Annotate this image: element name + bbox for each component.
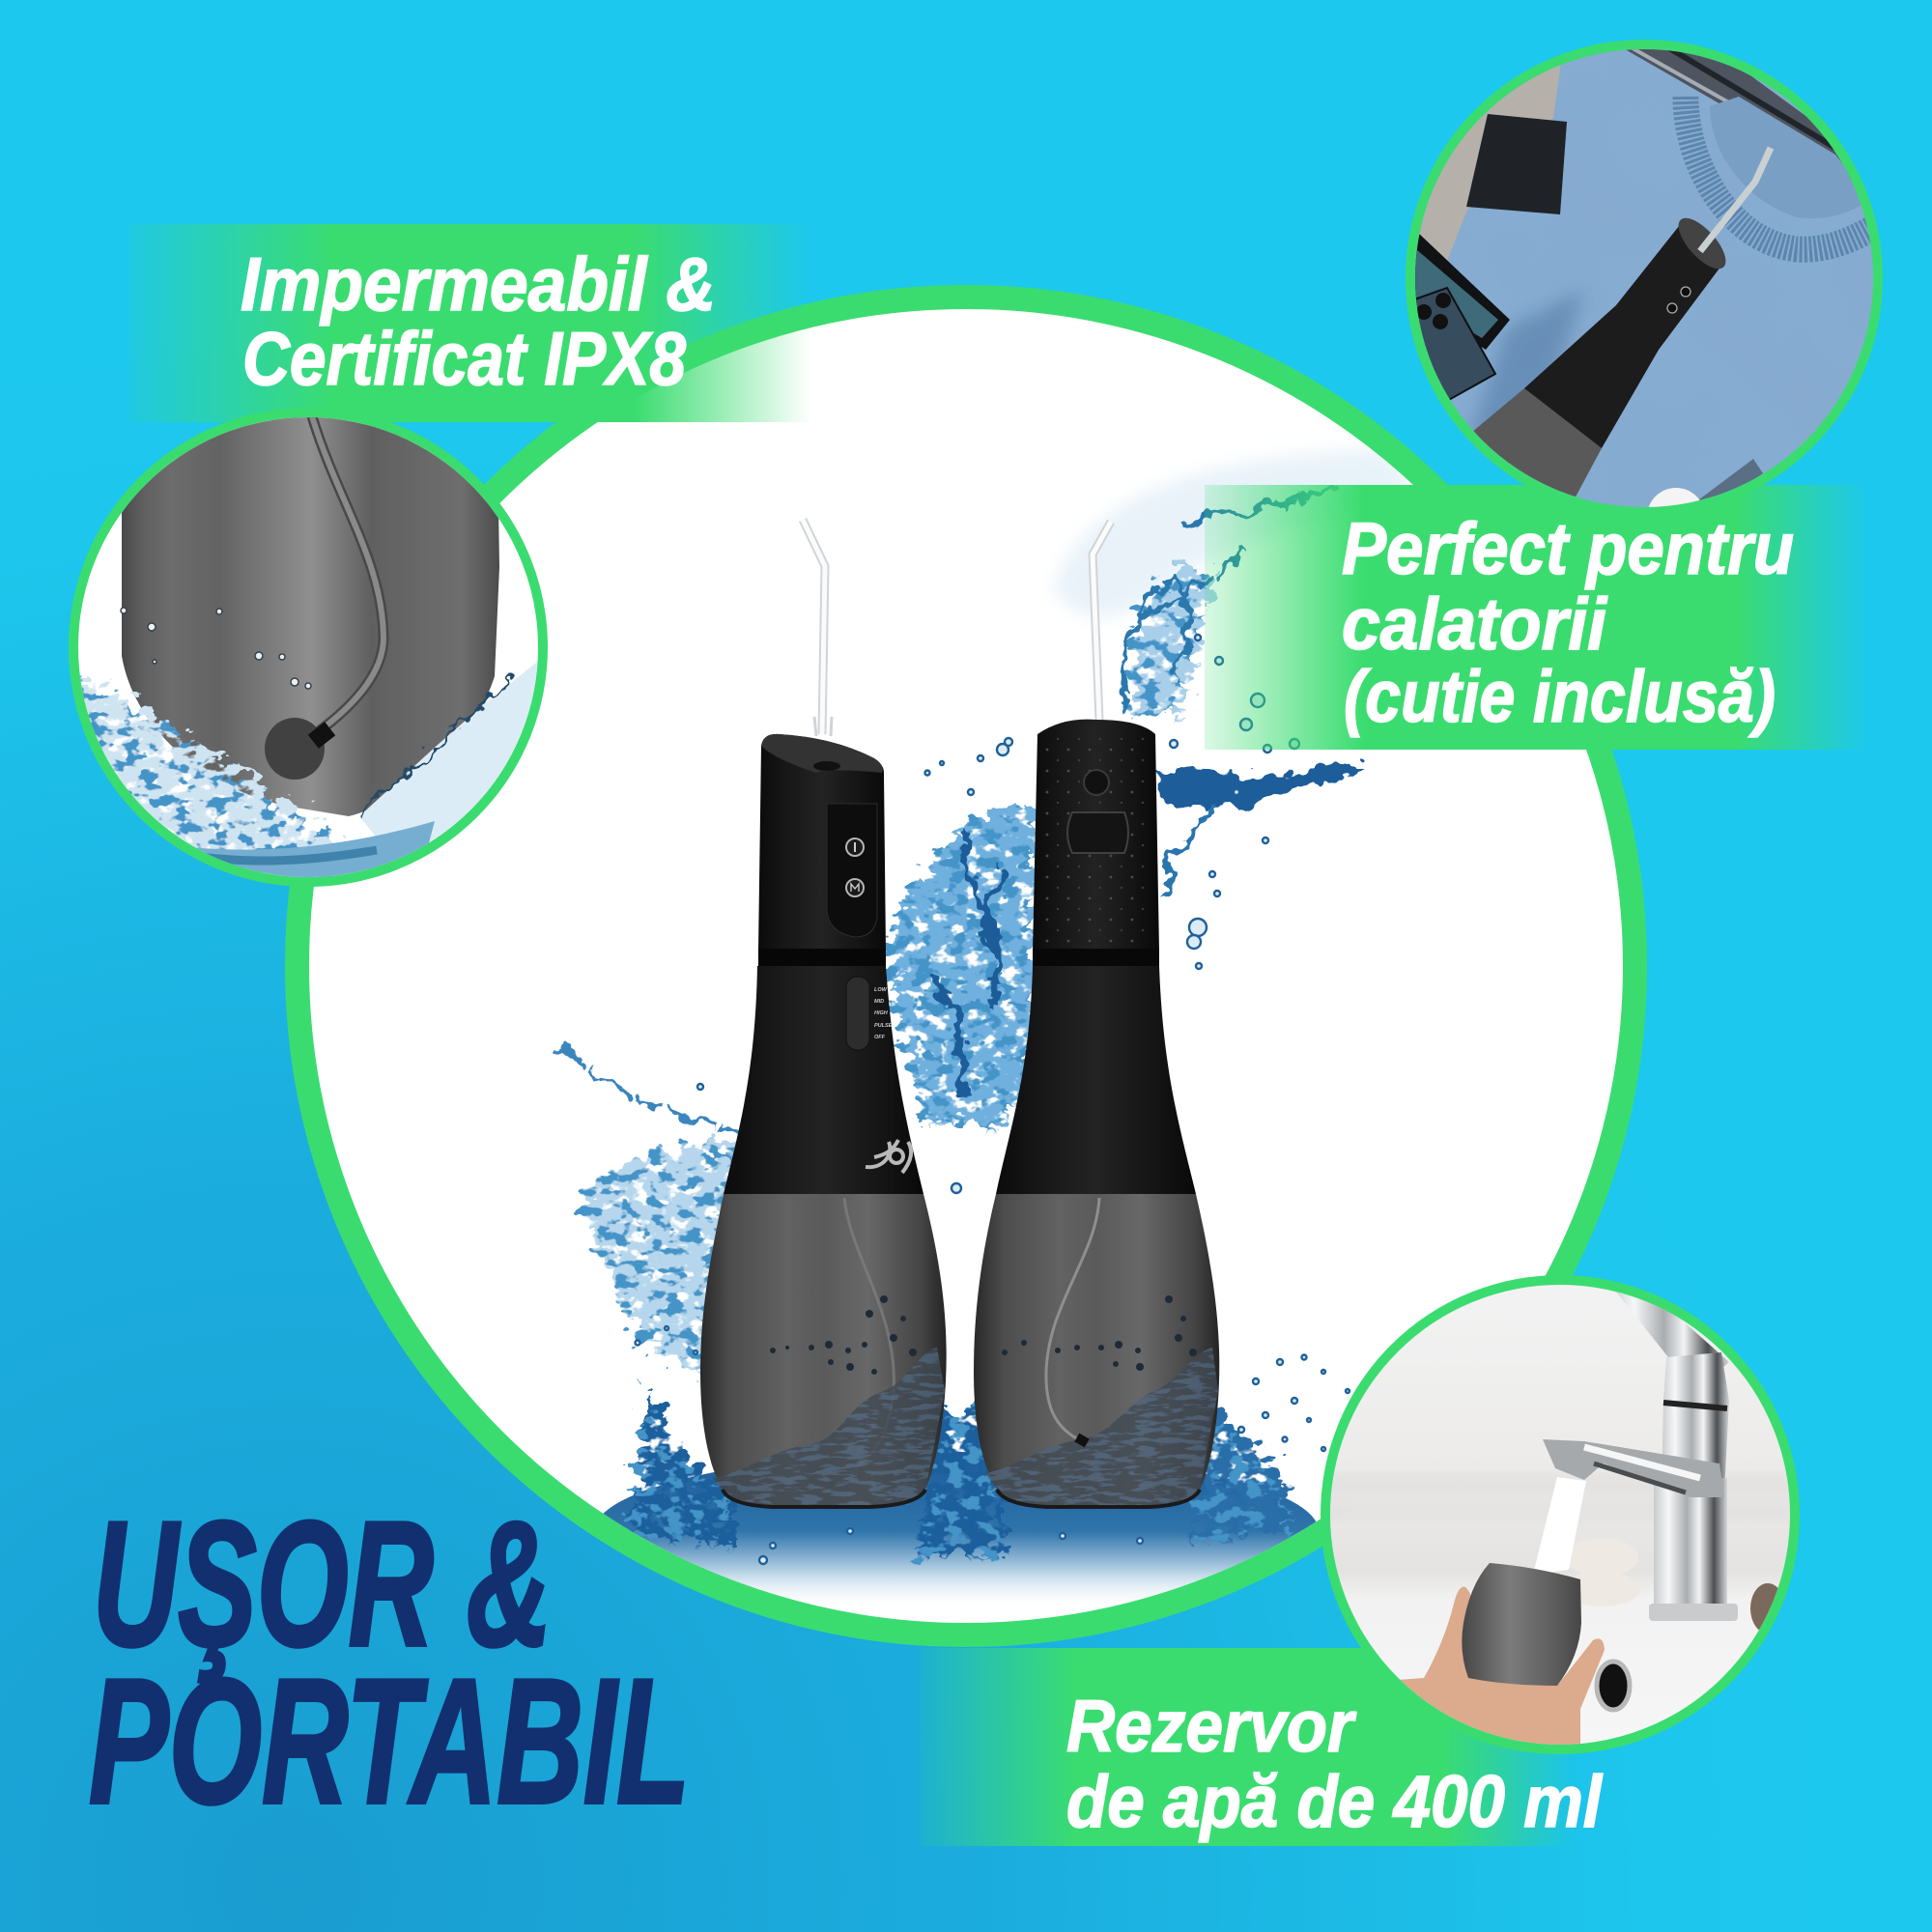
label: impermeabil — [241, 242, 716, 401]
drain — [1597, 1662, 1630, 1710]
splash: upper right streaks — [1123, 488, 1343, 715]
suitcase zipper — [1626, 49, 1853, 185]
tank rim — [997, 1490, 1200, 1507]
splash: centre behind bottles — [892, 802, 1038, 1130]
sweater — [1415, 49, 1873, 507]
tube — [312, 416, 384, 731]
cloth — [1419, 66, 1561, 261]
splash: upper right body — [1130, 570, 1217, 720]
product buttons — [1667, 287, 1690, 313]
top cap — [761, 734, 883, 773]
label: travel: calatorii — [1342, 583, 1608, 666]
splash: left wash — [583, 1144, 744, 1377]
black phone — [1466, 114, 1567, 214]
banner: perfect pentru calatorii — [1205, 485, 1869, 750]
tank close-up — [122, 386, 499, 816]
title: PORTABIL — [89, 1641, 690, 1840]
water pool — [594, 1452, 1319, 1610]
button — [1084, 770, 1109, 795]
product body — [1524, 221, 1721, 448]
sweater shadow — [1469, 292, 1584, 431]
splash lines right — [359, 676, 512, 811]
faucet column — [1654, 1478, 1727, 1608]
product head — [1671, 211, 1733, 276]
tube — [844, 1198, 894, 1468]
soft wall bands — [1314, 1478, 1816, 1517]
water tank — [974, 1194, 1219, 1507]
control panel — [827, 804, 877, 937]
nozzle — [1093, 522, 1111, 720]
sponge — [1750, 1583, 1785, 1634]
bubbles in tank — [770, 1295, 917, 1375]
splash: crown between bottles — [918, 1410, 1009, 1555]
lower black body — [724, 966, 923, 1194]
speaker dots — [1045, 736, 1150, 944]
water inside tank — [713, 1348, 945, 1507]
speed slider: HIGH — [874, 1010, 889, 1016]
speed slider — [846, 977, 893, 1050]
faucet lever — [1610, 1285, 1729, 1391]
banner: impermeabil — [129, 224, 811, 422]
speed slider: OFF — [874, 1035, 886, 1040]
bubbles in tank — [1002, 1295, 1197, 1371]
photo circle: waterproof tank — [58, 386, 543, 898]
label: travel — [1342, 508, 1794, 738]
title: UŞOR & — [93, 1484, 552, 1683]
hand — [1398, 1587, 1605, 1753]
collar band — [758, 949, 886, 966]
bubbles — [121, 608, 311, 689]
nozzle — [1700, 148, 1771, 251]
label: travel: Perfect pentru — [1342, 508, 1794, 590]
valve ball — [265, 718, 325, 780]
refill tank — [1462, 1563, 1581, 1686]
label: reservoir: de apă de 400 ml — [1066, 1761, 1604, 1843]
tablet — [1415, 234, 1510, 350]
latch — [1067, 812, 1128, 853]
upper body — [1033, 720, 1159, 952]
water splash right — [359, 659, 541, 850]
splash: crown left of bottles — [618, 1391, 734, 1546]
tank rim — [723, 1490, 925, 1507]
tube — [1046, 1198, 1099, 1441]
speed slider: PULSE — [874, 1023, 893, 1029]
water tank — [700, 1194, 947, 1507]
photo circle: travel — [1406, 40, 1883, 507]
water surface dark band — [184, 850, 377, 861]
photo circle: refilling at faucet — [1314, 1280, 1816, 1753]
speed slider: MID — [874, 999, 884, 1005]
splash: centre dark streaks — [927, 831, 1005, 1101]
speed slider: LOW — [874, 987, 888, 993]
power button — [846, 838, 864, 856]
label: reservoir: Rezervor — [1066, 1686, 1357, 1768]
head and upper body — [758, 734, 886, 952]
water splash left — [79, 676, 346, 877]
nozzle — [803, 520, 832, 736]
watch — [1647, 459, 1763, 546]
product: right water flosser — [974, 522, 1219, 1507]
water surface — [196, 821, 435, 877]
lower black body — [996, 966, 1196, 1194]
splash: right streak — [1155, 763, 1370, 809]
product: left water flosser — [700, 520, 947, 1507]
mode button — [846, 879, 864, 896]
droplets — [636, 635, 1350, 1564]
title — [89, 1484, 690, 1840]
banner: rezervor — [920, 1648, 1575, 1846]
sweater collar — [1686, 97, 1879, 249]
panel: main circle — [298, 298, 1634, 1634]
water inside tank — [985, 1348, 1218, 1507]
label: reservoir — [1066, 1686, 1604, 1843]
logo — [866, 1140, 911, 1173]
splash: crown right of bottles — [1188, 1401, 1299, 1546]
label: travel: (cutie inclusă) — [1344, 656, 1776, 738]
tablet screen — [1415, 250, 1498, 338]
splash: pale wash upper right — [1053, 449, 1420, 616]
water tank — [1474, 388, 1602, 497]
faucet base — [1649, 1604, 1738, 1621]
water splash illustration — [560, 449, 1420, 1610]
inner neck — [1710, 97, 1869, 218]
tube fitting — [1074, 1434, 1090, 1447]
faucet upper — [1662, 1352, 1729, 1492]
collar band — [1033, 949, 1159, 966]
faucet ring — [1663, 1403, 1727, 1408]
label: impermeabil: Impermeabil & — [241, 242, 716, 327]
fitting — [308, 722, 335, 749]
water stream — [1533, 1477, 1586, 1575]
faucet spout — [1543, 1439, 1724, 1497]
nozzle socket — [813, 761, 840, 771]
splash: left upper streak — [560, 1048, 744, 1128]
stones — [1563, 1538, 1640, 1606]
splash: right branch — [1164, 802, 1217, 894]
label: impermeabil: Certificat IPX8 — [242, 316, 687, 401]
smartphone — [1416, 286, 1497, 400]
